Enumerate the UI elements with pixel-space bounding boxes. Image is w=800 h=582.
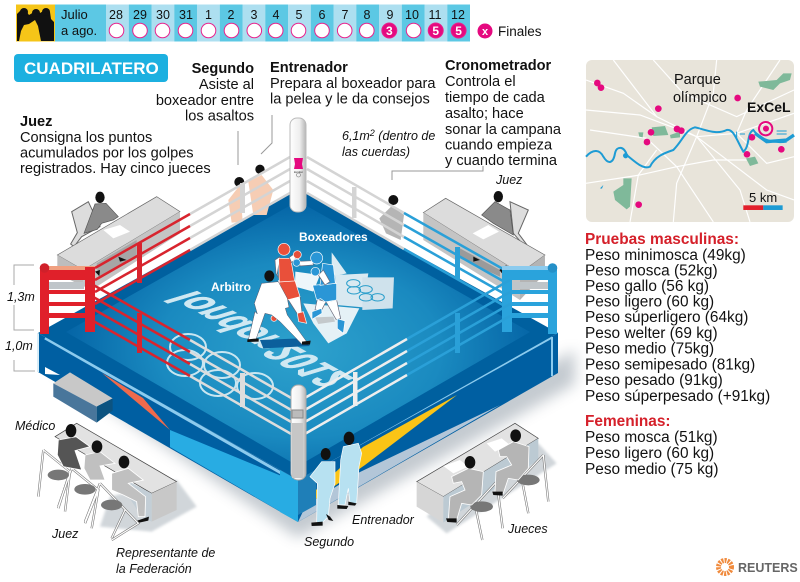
right side apron <box>280 333 558 522</box>
calendar dates: 31 <box>179 8 193 22</box>
list: pruebas masculinas: Peso mosca (52kg) <box>585 262 718 280</box>
map labels: ExCeL <box>747 99 791 115</box>
dimension lines <box>14 265 35 371</box>
ring labels: 1,0m <box>5 339 33 353</box>
text block: cronometrador: tiempo de cada <box>445 90 546 106</box>
list: pruebas masculinas: Pruebas masculinas: <box>585 231 739 248</box>
on-mat labels <box>211 230 368 294</box>
finals counts: 5 <box>432 24 439 38</box>
roads <box>586 60 794 222</box>
officials table: front left <box>38 423 197 540</box>
ring labels: las cuerdas) <box>342 145 410 159</box>
date label: a ago. <box>61 23 97 38</box>
ring labels: 2 <box>369 128 375 138</box>
text block: entrenador: la pelea y le da consejos <box>270 92 430 108</box>
text block: juez: acumulados por los golpes <box>20 146 194 162</box>
on-mat labels: Boxeadores <box>299 230 368 244</box>
text block: cronometrador: sonar la campana <box>445 122 562 138</box>
top corner post <box>290 118 306 212</box>
list: pruebas masculinas: Peso ligero (60 kg) <box>585 294 714 310</box>
text block: juez: Juez <box>20 114 52 130</box>
front corner post <box>291 385 306 480</box>
on-mat labels: Arbitro <box>211 280 251 294</box>
text block: entrenador: Entrenador <box>270 60 348 76</box>
list: pruebas masculinas: Peso welter (69 kg) <box>585 325 718 342</box>
scale bar <box>743 205 763 210</box>
list: pruebas masculinas: Peso súperligero (64kg) <box>585 309 748 326</box>
calendar dates: 3 <box>251 8 258 22</box>
text block: cronometrador <box>445 58 562 169</box>
calendar dates: 29 <box>133 8 147 22</box>
boxer in red <box>271 243 307 323</box>
map labels: 5 km <box>749 190 777 205</box>
finals counts <box>386 24 462 38</box>
text block: cronometrador: asalto; hace <box>445 106 524 122</box>
calendar dates: 8 <box>364 8 371 22</box>
left side apron <box>38 333 298 522</box>
text block: segundo: los asaltos <box>185 108 254 124</box>
ground shadow <box>60 350 575 538</box>
ring labels: 1,3m <box>7 290 35 304</box>
calendar dates: 11 <box>429 8 442 22</box>
legend: finales: x <box>482 26 489 38</box>
officials behind back ropes <box>228 165 273 223</box>
map labels: Parque <box>674 72 721 88</box>
text block: cronometrador: Cronometrador <box>445 58 552 74</box>
list: pruebas masculinas: Peso gallo (56 kg) <box>585 278 709 295</box>
cronometrador <box>379 195 404 240</box>
legend: finales: Finales <box>498 24 542 39</box>
icon: london 2012 logo: london <box>294 170 303 174</box>
list: pruebas masculinas: Peso súperpesado (+91kg) <box>585 388 770 405</box>
heading: cuadrilatero: CUADRILATERO <box>24 59 159 78</box>
list: femeninas: Femeninas: <box>585 413 671 430</box>
calendar dates: 5 <box>296 8 303 22</box>
calendar dates: 1 <box>205 8 212 22</box>
text block: juez <box>20 114 211 177</box>
ropes: back left <box>95 157 290 304</box>
calendar dates: 30 <box>156 8 170 22</box>
calendar dates: 2 <box>228 8 235 22</box>
judge and table: back right <box>423 191 545 300</box>
seated figures <box>57 437 90 470</box>
calendar strip <box>16 4 470 42</box>
ring labels: Segundo <box>304 535 354 549</box>
mat panels <box>332 252 347 276</box>
judge and table: back left <box>57 192 180 287</box>
referee <box>247 270 311 345</box>
ropes: front left <box>88 282 293 435</box>
list: pruebas masculinas: Peso semipesado (81kg) <box>585 356 755 374</box>
icon: boxers photo <box>16 4 55 42</box>
text block: entrenador <box>270 60 436 108</box>
list: femeninas <box>585 413 718 478</box>
calendar dates: 4 <box>273 8 280 22</box>
calendar dates: 10 <box>405 8 419 22</box>
map labels: olímpico <box>673 90 727 106</box>
list: pruebas masculinas: Peso medio (75kg) <box>585 340 714 358</box>
text block: segundo: Asiste al <box>199 77 254 93</box>
text block: juez: Consigna los puntos <box>20 130 152 146</box>
london 2012 mat lettering: london2012 <box>154 287 365 391</box>
finals counts: 3 <box>386 24 393 38</box>
calendar dates: 28 <box>109 8 123 22</box>
calendar dates: 9 <box>387 8 394 22</box>
ring labels: Entrenador <box>352 513 415 527</box>
calendar dates: 12 <box>451 8 465 22</box>
list: femeninas: Peso mosca (51kg) <box>585 429 718 446</box>
ring labels: Juez <box>51 527 79 541</box>
text block: segundo: boxeador entre <box>156 93 254 109</box>
heading: cuadrilatero <box>14 54 168 82</box>
olympic rings on mat <box>167 334 273 399</box>
ring platform <box>38 189 558 522</box>
calendar circles <box>109 23 466 38</box>
ring labels: Juez <box>495 173 523 187</box>
list: pruebas masculinas: Peso minimosca (49kg) <box>585 247 746 264</box>
boxers and referee <box>247 243 394 348</box>
text block: entrenador: Prepara al boxeador para <box>270 76 436 92</box>
green areas <box>613 73 792 209</box>
blue corner post <box>502 263 557 334</box>
calendar dates: 6 <box>319 8 326 22</box>
ropes: front right <box>303 280 510 435</box>
list: pruebas masculinas: Peso pesado (91kg) <box>585 372 723 389</box>
chairs <box>457 455 548 540</box>
calendar dates: 7 <box>342 8 349 22</box>
list: femeninas: Peso ligero (60 kg) <box>585 445 714 462</box>
text block: segundo <box>156 61 254 124</box>
ring labels <box>5 128 548 576</box>
ring labels: Médico <box>15 419 55 433</box>
ropes: back right <box>307 157 503 305</box>
map labels <box>673 72 791 205</box>
venue dots <box>594 80 785 208</box>
date label: Julio <box>61 7 88 22</box>
list: pruebas masculinas <box>585 231 770 405</box>
reuters logo: REUTERS <box>738 561 798 575</box>
calendar dates <box>109 8 465 22</box>
chairs <box>38 450 138 540</box>
boxer in blue <box>293 252 345 333</box>
coach and second <box>310 432 362 526</box>
text block: juez: registrados. Hay cinco jueces <box>20 161 211 177</box>
canvas top <box>38 189 558 480</box>
text block: segundo: Segundo <box>192 61 254 77</box>
locator map <box>586 60 794 222</box>
judges table: front right <box>417 423 557 540</box>
ring labels: la Federación <box>116 562 192 576</box>
text block: cronometrador: y cuando termina <box>445 153 558 169</box>
list: femeninas: Peso medio (75 kg) <box>585 461 718 478</box>
date label <box>55 4 106 42</box>
equipment box <box>53 372 113 423</box>
finals counts: 5 <box>455 24 462 38</box>
ring labels: Representante de <box>116 546 215 560</box>
seated figures <box>448 468 483 520</box>
text block: cronometrador: cuando empieza <box>445 138 553 154</box>
text block: cronometrador: Controla el <box>445 74 516 90</box>
ring labels: 6,1m <box>342 129 370 143</box>
ring labels: Jueces <box>507 522 548 536</box>
legend: finales <box>478 24 542 39</box>
river thames <box>586 127 787 167</box>
red corner post <box>40 263 95 334</box>
leader lines <box>238 115 483 180</box>
ring labels: (dentro de <box>375 129 435 143</box>
